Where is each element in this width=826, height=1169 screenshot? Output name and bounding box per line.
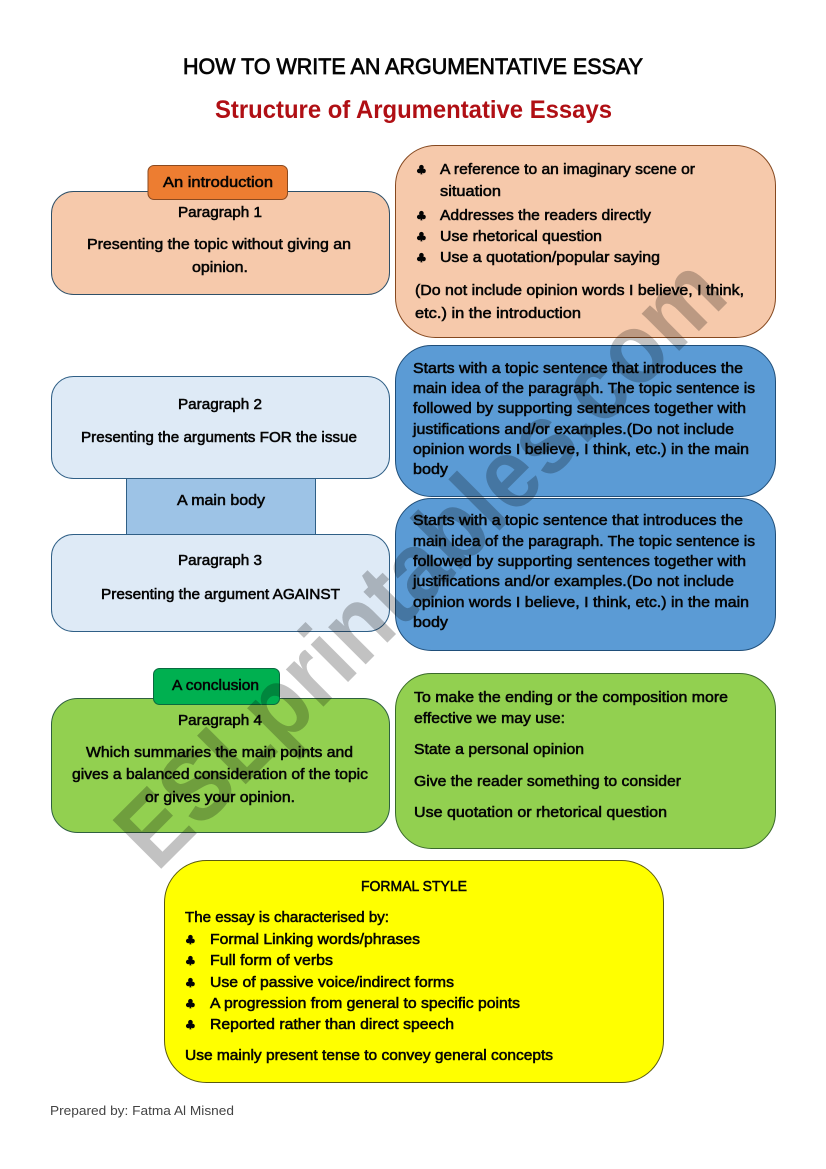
text: paragraph 3 detail: justifications and/or examples.(Do not include	[412, 573, 734, 590]
label: a conclusion tab	[154, 668, 280, 704]
text: introduction left	[87, 174, 351, 276]
text: paragraph 3	[101, 552, 340, 603]
text: introduction left: Paragraph 1	[178, 204, 262, 221]
text: formal style: ♣	[185, 976, 196, 990]
text: introduction left: An introduction	[163, 174, 273, 191]
text: paragraph 2 detail: body	[413, 461, 449, 478]
text: formal style: Reported rather than direct speech	[210, 1016, 454, 1033]
text: conclusion left: Which summaries the main points and	[86, 744, 353, 761]
panel: paragraph 3 box	[52, 534, 390, 632]
text: paragraph 2: Paragraph 2	[178, 396, 262, 413]
text: introduction tips: A reference to an imaginary scene or	[440, 161, 695, 178]
text: conclusion tips: Give the reader something to consider	[414, 773, 681, 790]
text: paragraph 3 detail: body	[413, 614, 449, 631]
text: formal style: Full form of verbs	[210, 952, 333, 969]
text: introduction tips: ♣	[416, 230, 427, 244]
text: paragraph 3: Presenting the argument AGAINST	[101, 586, 340, 603]
text: conclusion left	[72, 677, 369, 806]
text: introduction left: Presenting the topic without giving an	[87, 236, 351, 253]
text: formal style: The essay is characterised by:	[185, 909, 389, 926]
text: formal style: ♣	[185, 933, 196, 947]
text: conclusion tips: To make the ending or the composition more	[414, 689, 728, 706]
text: paragraph 2 detail: followed by supporting sentences together with	[413, 400, 746, 417]
footer credit: Prepared by: Fatma Al Misned	[50, 1103, 234, 1118]
panel: paragraph 2 box	[52, 376, 390, 478]
text: formal style: Use of passive voice/indirect forms	[210, 974, 454, 991]
text: introduction tips: situation	[440, 183, 501, 200]
text: a main body: A main body	[177, 492, 266, 509]
text: conclusion tips: Use quotation or rhetorical question	[414, 804, 667, 821]
panel: paragraph 4 box	[52, 698, 390, 832]
text: formal style: ♣	[185, 1018, 196, 1032]
subtitle: Structure of Argumentative Essays	[215, 96, 612, 124]
label: an introduction tab	[148, 166, 288, 200]
panel: introduction tips box	[396, 146, 776, 338]
text: introduction tips: ♣	[416, 251, 427, 265]
text: paragraph 2 detail: main idea of the paragraph. The topic sentence is	[413, 380, 755, 397]
text: formal style: ♣	[185, 954, 196, 968]
text: introduction tips: ♣	[416, 163, 427, 177]
text: formal style	[185, 878, 553, 1064]
text: paragraph 2 detail: Starts with a topic sentence that introduces the	[413, 360, 743, 377]
text: paragraph 3 detail: Starts with a topic sentence that introduces the	[413, 512, 743, 529]
text: paragraph 3 detail	[412, 512, 755, 631]
text: formal style: Use mainly present tense to convey general concepts	[185, 1047, 553, 1064]
text: formal style: A progression from general to specific points	[210, 995, 520, 1012]
text: conclusion tips	[414, 689, 728, 821]
panel: formal style box	[164, 860, 664, 1082]
text: introduction tips: etc.) in the introduction	[415, 305, 581, 322]
text: paragraph 2 detail: justifications and/or examples.(Do not include	[412, 421, 734, 438]
text: paragraph 2 detail	[412, 360, 755, 478]
panel: conclusion tips box	[396, 674, 776, 848]
panel: paragraph 1 box	[52, 192, 390, 294]
panel: paragraph 2 detail box	[396, 346, 776, 496]
panel: paragraph 3 detail box	[396, 498, 776, 650]
text: introduction tips: ♣	[416, 209, 427, 223]
text: conclusion left: or gives your opinion.	[145, 789, 295, 806]
text: introduction left: opinion.	[192, 259, 248, 276]
text: paragraph 3: Paragraph 3	[178, 552, 262, 569]
text: introduction tips	[415, 161, 744, 322]
watermark: ESLprintables.com	[93, 235, 747, 889]
text: introduction tips: Use a quotation/popular saying	[440, 249, 660, 266]
text: conclusion left: Paragraph 4	[178, 712, 262, 729]
label: a main body connector	[126, 478, 316, 534]
text: conclusion left: A conclusion	[172, 677, 259, 694]
text: formal style: ♣	[185, 997, 196, 1011]
text: paragraph 3 detail: followed by supporting sentences together with	[413, 553, 746, 570]
text: paragraph 2	[81, 396, 357, 446]
text: paragraph 2 detail: opinion words I believe, I think, etc.) in the main	[413, 441, 749, 458]
text: conclusion left: gives a balanced consideration of the topic	[72, 766, 369, 783]
text: introduction tips: Use rhetorical question	[440, 228, 602, 245]
text: paragraph 2: Presenting the arguments FOR the issue	[81, 429, 357, 446]
text: introduction tips: (Do not include opinion words I believe, I think,	[415, 282, 744, 299]
text: formal style: Formal Linking words/phrases	[210, 931, 420, 948]
text: conclusion tips: effective we may use:	[414, 710, 565, 727]
text: paragraph 3 detail: main idea of the paragraph. The topic sentence is	[413, 533, 755, 550]
text: introduction tips: Addresses the readers directly	[440, 207, 652, 224]
text: paragraph 3 detail: opinion words I believe, I think, etc.) in the main	[413, 594, 749, 611]
title: HOW TO WRITE AN ARGUMENTATIVE ESSAY	[183, 54, 643, 79]
text: conclusion tips: State a personal opinion	[414, 741, 584, 758]
text: formal style: FORMAL STYLE	[361, 878, 467, 895]
